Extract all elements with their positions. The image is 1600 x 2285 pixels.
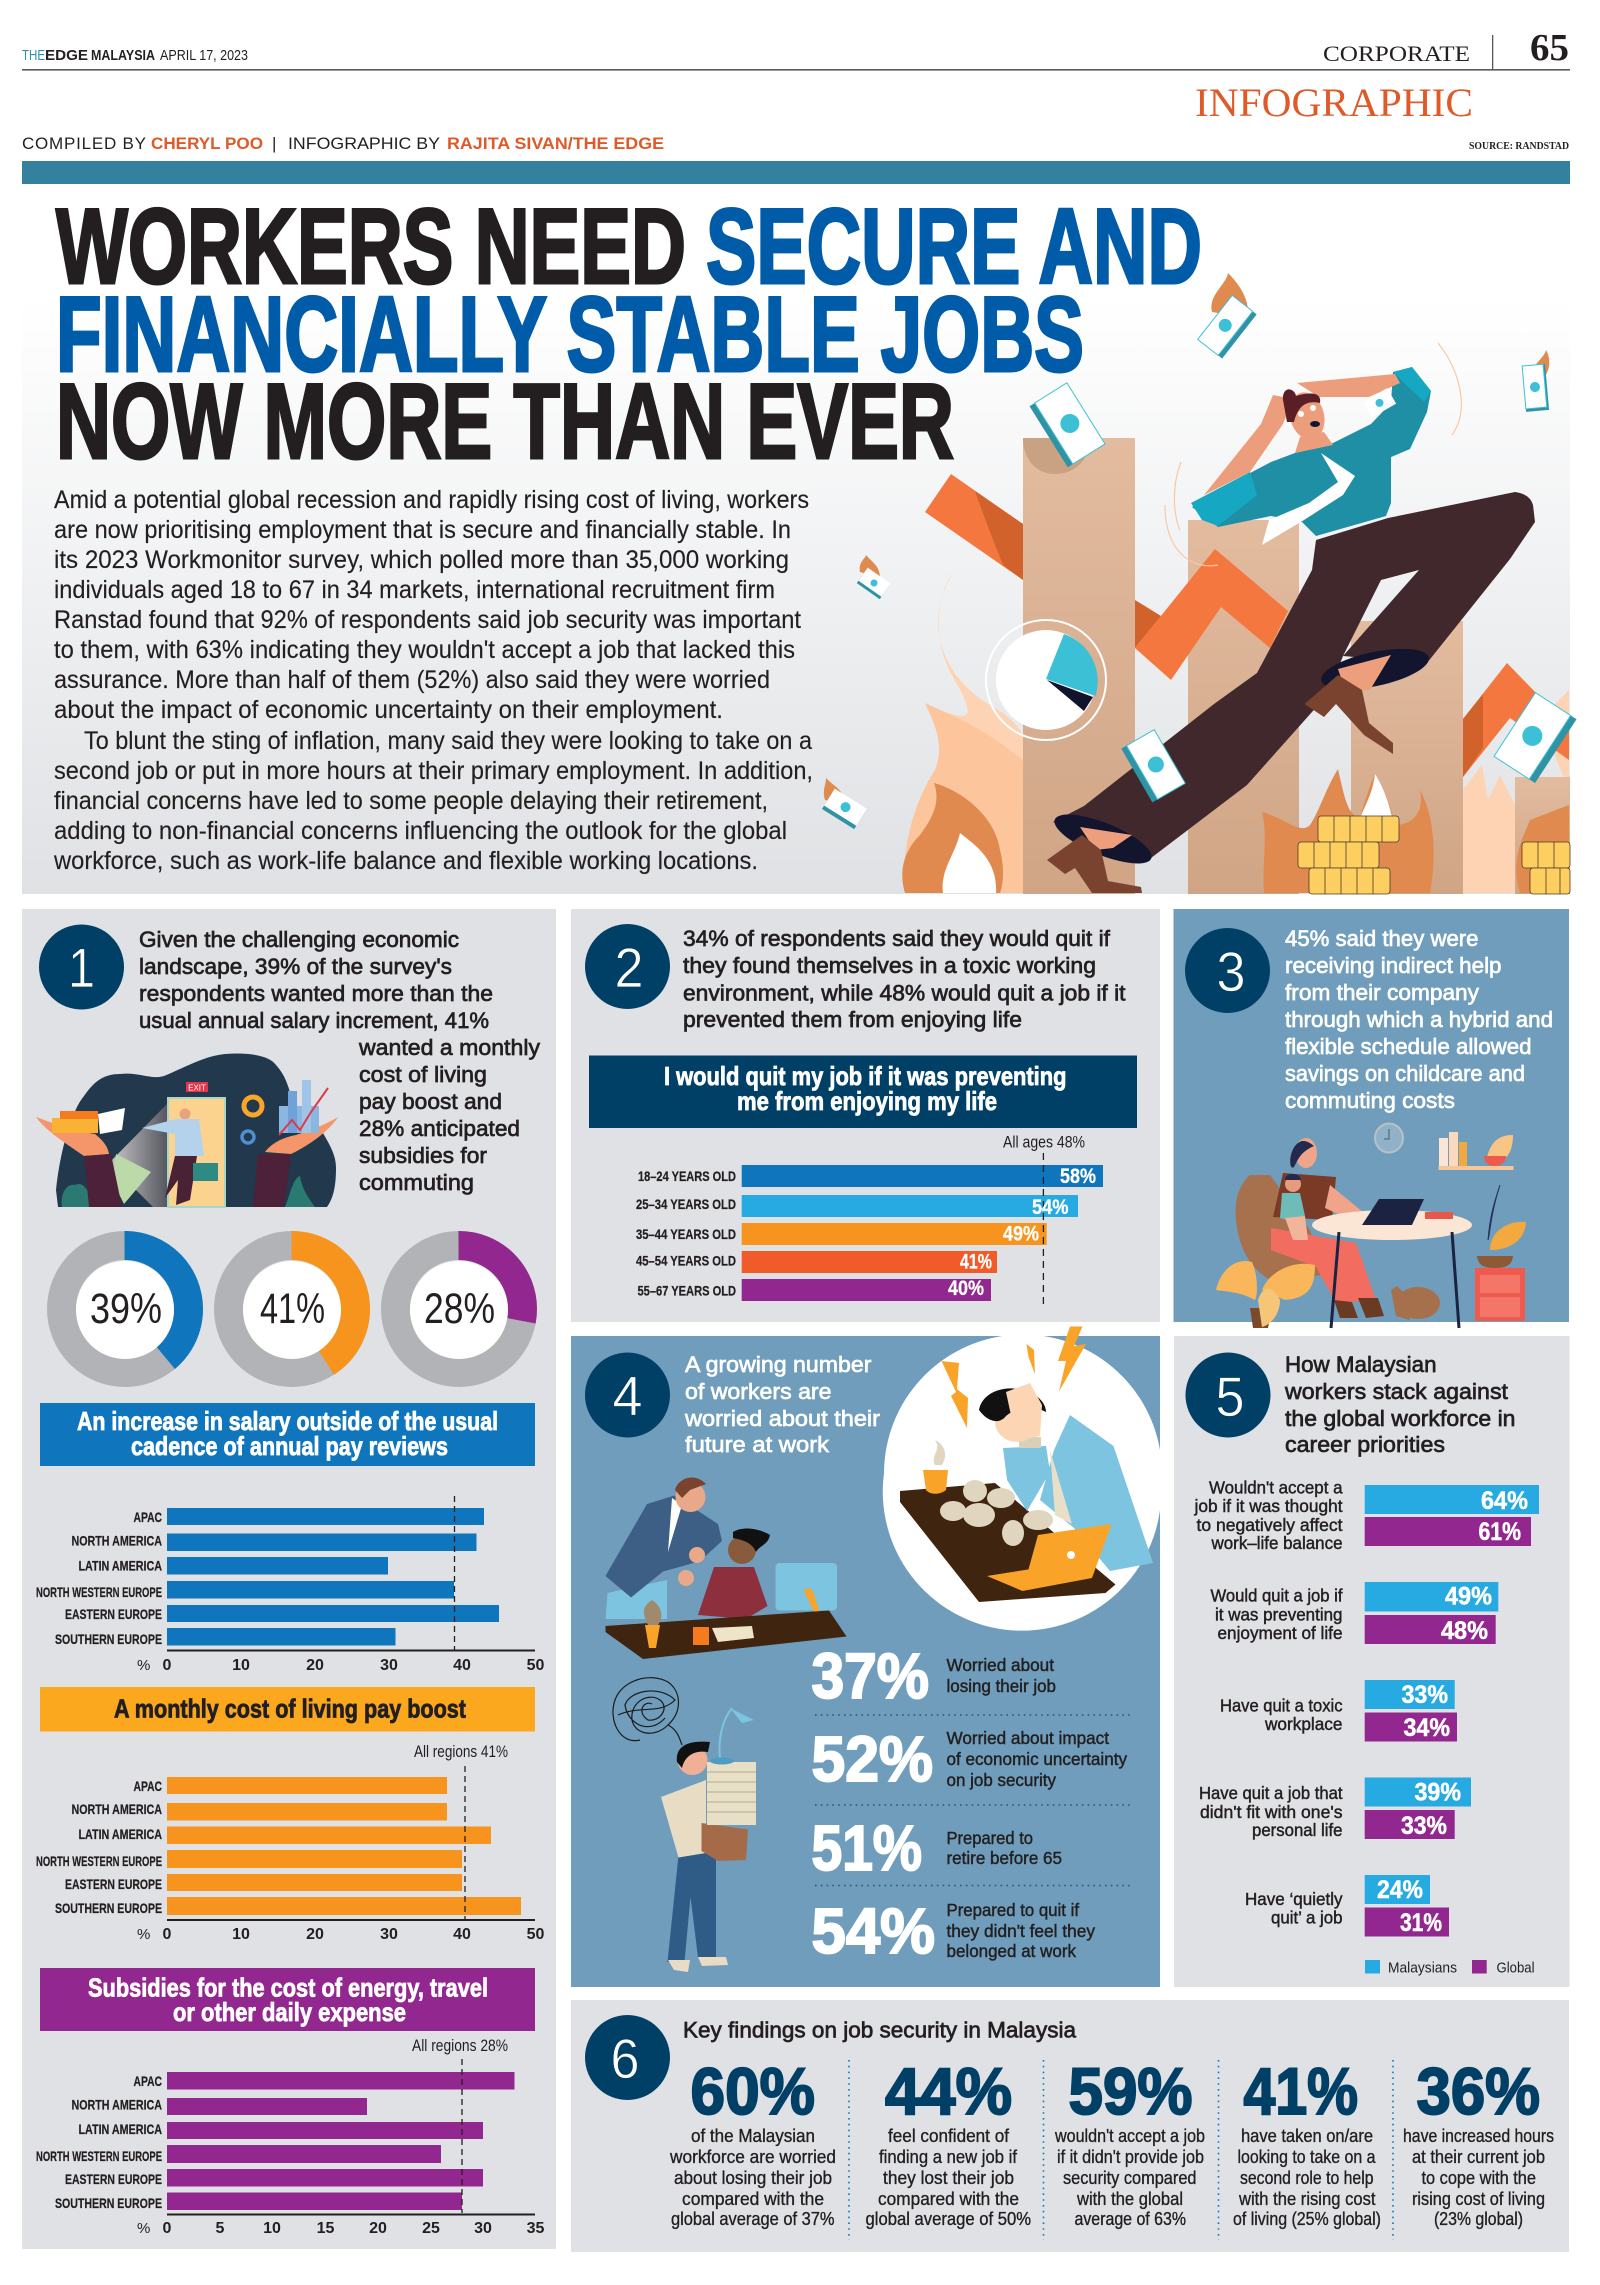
comparison: toxic workplace [1220, 1680, 1457, 1742]
intro text: second job or put in more hours at their primary employment. In addition, [54, 757, 813, 785]
intro text: its 2023 Workmonitor survey, which polled more than 35,000 working [54, 546, 789, 574]
illustration: worried man carrying box [613, 1678, 756, 1972]
finding: 41% [1233, 2054, 1381, 2229]
flames behind charts [904, 573, 1023, 893]
stat: 54%: 54% [812, 1895, 935, 1967]
bar chart: cost of living boost by region: NORTH WESTERN EUROPE [36, 1853, 162, 1869]
number badge 3 [1185, 928, 1270, 1013]
panel 1 intro text: Given the challenging economic [139, 927, 459, 952]
comparison: personal life fit: personal life [1252, 1820, 1342, 1840]
donut: 28% [396, 1246, 522, 1372]
bar chart: cost of living boost by region: % [137, 1926, 150, 1943]
stat: 37%: 37% [812, 1640, 929, 1712]
source note: SOURCE: RANDSTAD [1469, 140, 1569, 152]
hero illustration: falling worker and burning charts [822, 273, 1577, 894]
bar chart: salary increase by region: % [137, 1657, 150, 1674]
headline: FINANCIALLY STABLE JOBS [56, 274, 1084, 394]
bar chart: subsidies by region: LATIN AMERICA [78, 2121, 162, 2137]
bar chart: subsidies by region: 0 [163, 2220, 172, 2237]
credits line: RAJITA SIVAN/THE EDGE [447, 134, 664, 153]
comparison: quiet quitting: quit’ a job [1271, 1908, 1342, 1928]
panel: hero [22, 184, 1577, 894]
bar chart: subsidies by region: 30 [474, 2220, 492, 2237]
chart heading: salary increase [40, 1403, 535, 1466]
finding: 60%: compared with the [682, 2189, 824, 2209]
illustration: boss and employee at desk [606, 1477, 846, 1659]
comparison: personal life fit: 33% [1401, 1812, 1447, 1840]
panel 2 intro text: 34% of respondents said they would quit if [683, 926, 1111, 951]
panel 1 intro text [139, 927, 541, 1195]
chart bars [1023, 438, 1135, 894]
finding: 59%: security compared [1063, 2168, 1196, 2188]
intro text: individuals aged 18 to 67 in 34 markets, international recruitment firm [54, 576, 775, 604]
number badge 6 [585, 2015, 670, 2100]
chart heading: salary increase: An increase in salary outside of the usual [77, 1406, 498, 1436]
shirt [1192, 424, 1391, 536]
comparison: enjoyment of life: 48% [1441, 1617, 1488, 1645]
coins [1298, 816, 1570, 894]
bar chart: subsidies by region: 35 [527, 2220, 544, 2237]
panel 5: Malaysia vs global [1174, 1336, 1570, 1987]
comparison: work-life balance [1194, 1478, 1539, 1553]
illustration: stressed man at desk [883, 1326, 1160, 1631]
bar chart: cost of living boost by region: 30 [380, 1926, 398, 1943]
page number: 65 [1530, 27, 1569, 69]
panel 1 intro text: pay boost and [359, 1089, 502, 1114]
finding: 36%: rising cost of living [1412, 2189, 1545, 2209]
number badge 4: 4 [612, 1364, 642, 1427]
donut: 41% [228, 1246, 356, 1372]
number badge 5 [1186, 1352, 1270, 1438]
panel 1 intro text: wanted a monthly [358, 1035, 541, 1060]
stat: 37% [812, 1640, 1056, 1712]
intro text: adding to non-financial concerns influencing the outlook for the global [54, 817, 787, 845]
panel 2 intro text: they found themselves in a toxic working [683, 953, 1096, 978]
panel 1 intro text: cost of living [359, 1062, 487, 1087]
bar chart: cost of living boost by region: APAC [134, 1778, 162, 1794]
chart heading: subsidies [40, 1968, 535, 2031]
comparison: toxic workplace: workplace [1264, 1714, 1342, 1734]
stat: 52%: on job security [946, 1770, 1056, 1790]
bar chart: cost of living boost by region [36, 1742, 544, 1943]
panel 2 intro text: environment, while 48% would quit a job if it [683, 980, 1126, 1006]
chart heading: cost of living boost: A monthly cost of living pay boost [114, 1694, 466, 1724]
finding: 59% [1054, 2054, 1205, 2229]
number badge 2: 2 [614, 936, 644, 999]
headline: NOW MORE THAN EVER [56, 361, 954, 481]
bar chart: quit job by age group [636, 1132, 1103, 1304]
panel 3 text: commuting costs [1285, 1088, 1455, 1113]
comparison: personal life fit [1199, 1778, 1471, 1840]
panel 3 text: receiving indirect help [1285, 953, 1502, 978]
panel 3 text: savings on childcare and [1285, 1061, 1525, 1086]
intro text: assurance. More than half of them (52%) also said they were worried [54, 666, 770, 694]
legend [1365, 1960, 1534, 1976]
comparison: work-life balance: job if it was thought [1194, 1496, 1343, 1516]
bar chart: quit job by age group: 45–54 YEARS OLD [636, 1252, 736, 1268]
donut: 41%: 41% [260, 1285, 325, 1333]
comparison: quiet quitting: 24% [1377, 1876, 1423, 1904]
finding: 41%: second role to help [1240, 2168, 1374, 2188]
panel 3 text: flexible schedule allowed [1285, 1034, 1532, 1059]
finding: 59%: 59% [1068, 2054, 1192, 2128]
bar chart: subsidies by region: NORTH WESTERN EUROPE [36, 2148, 162, 2164]
arms and head [1204, 395, 1293, 495]
masthead: The Edge Malaysia date [22, 47, 248, 64]
front flames [902, 783, 1003, 893]
bar chart: quit job by age group: 40% [948, 1277, 984, 1300]
bar chart: cost of living boost by region: 0 [163, 1926, 172, 1943]
panel 5 text [1284, 1352, 1516, 1457]
finding: 60%: 60% [690, 2054, 815, 2128]
chart heading: quit my job: me from enjoying my life [737, 1086, 997, 1116]
bar chart: quit job by age group: 58% [1060, 1165, 1096, 1188]
bar chart: cost of living boost by region: NORTH AMERICA [72, 1801, 162, 1817]
pie chart [986, 620, 1106, 740]
stat: 52%: Worried about impact [946, 1728, 1109, 1748]
legend: Global [1496, 1960, 1534, 1976]
headline [56, 186, 1202, 481]
finding: 41%: have taken on/are [1241, 2126, 1373, 2146]
comparison: work-life balance: Wouldn't accept a [1209, 1478, 1343, 1498]
bar chart: cost of living boost by region: 10 [232, 1926, 250, 1943]
number badge 6: 6 [610, 2027, 640, 2090]
finding: 59%: if it didn't provide job [1057, 2147, 1204, 2167]
finding: 44%: finding a new job if [879, 2147, 1018, 2167]
comparison: enjoyment of life: 49% [1445, 1582, 1492, 1610]
finding: 60%: global average of 37% [671, 2209, 834, 2229]
credits line: INFOGRAPHIC BY [288, 134, 440, 153]
page masthead [22, 27, 1570, 153]
bar chart: salary increase by region: 20 [306, 1657, 324, 1674]
bar chart: salary increase by region: NORTH WESTERN EUROPE [36, 1584, 162, 1600]
panel 3 text: 45% said they were [1285, 926, 1478, 951]
comparison: enjoyment of life [1210, 1582, 1498, 1645]
finding: 41%: with the rising cost [1238, 2189, 1376, 2209]
masthead: The Edge Malaysia date: APRIL 17, 2023 [160, 47, 248, 64]
finding: 41%: looking to take on a [1238, 2147, 1376, 2167]
masthead: The Edge Malaysia date: THE [22, 47, 45, 64]
panel 2 intro text [683, 926, 1126, 1032]
stat: 54%: they didn't feel they [946, 1921, 1095, 1941]
bar chart: subsidies by region: 5 [216, 2220, 225, 2237]
panel 2 intro text: prevented them from enjoying life [683, 1007, 1022, 1032]
stat: 52%: 52% [812, 1723, 933, 1795]
finding: 59%: with the global [1076, 2189, 1183, 2209]
stat: 54%: belonged at work [946, 1941, 1076, 1961]
comparison: enjoyment of life: it was preventing [1215, 1604, 1342, 1624]
intro text: Amid a potential global recession and rapidly rising cost of living, workers [54, 486, 809, 514]
bar chart: salary increase by region: NORTH AMERICA [72, 1532, 162, 1548]
comparison: personal life fit: 39% [1414, 1778, 1461, 1806]
panel 4 text: A growing number [685, 1352, 872, 1377]
bar chart: salary increase by region: 0 [163, 1657, 172, 1674]
finding: 36%: 36% [1416, 2054, 1540, 2128]
number badge 2 [585, 924, 670, 1009]
panel 1 intro text: 28% anticipated [359, 1116, 520, 1141]
bar chart: salary increase by region: EASTERN EUROPE [65, 1606, 162, 1622]
masthead: The Edge Malaysia date: MALAYSIA [91, 47, 155, 64]
credits line [22, 134, 664, 153]
bar chart: subsidies by region: 25 [422, 2220, 440, 2237]
comparison: work-life balance: to negatively affect [1196, 1515, 1343, 1535]
bar chart: subsidies by region: 15 [317, 2220, 334, 2237]
finding: 59%: wouldn't accept a job [1054, 2126, 1205, 2146]
bar chart: quit job by age group: 25–34 YEARS OLD [636, 1196, 736, 1212]
panel 4 text [684, 1352, 881, 1457]
comparison: toxic workplace: 34% [1404, 1714, 1450, 1742]
bar chart: salary increase by region: SOUTHERN EUROPE [55, 1631, 162, 1647]
bar chart: quit job by age group: 18–24 YEARS OLD [638, 1168, 736, 1184]
chart heading: subsidies: or other daily expense [173, 1997, 406, 2027]
finding: 36%: at their current job [1412, 2147, 1545, 2167]
bar chart: cost of living boost by region: 40 [453, 1926, 471, 1943]
chart heading: salary increase: cadence of annual pay reviews [131, 1431, 448, 1461]
chart heading: quit my job: I would quit my job if it was preventing [664, 1061, 1066, 1091]
masthead: The Edge Malaysia date: EDGE [45, 47, 88, 64]
finding: 60%: about losing their job [674, 2168, 832, 2188]
bar chart: subsidies by region: APAC [134, 2073, 162, 2089]
bar chart: subsidies by region: EASTERN EUROPE [65, 2171, 162, 2187]
boots and cuffs [1047, 641, 1432, 893]
comparison: work-life balance: 64% [1481, 1487, 1528, 1515]
finding: 41%: 41% [1244, 2054, 1358, 2128]
comparison: quiet quitting: Have ‘quietly [1245, 1889, 1343, 1909]
comparison: personal life fit: Have quit a job that [1199, 1783, 1343, 1803]
stat: 52% [812, 1723, 1127, 1795]
finding: 60% [669, 2054, 836, 2229]
panel 4 text: of workers are [685, 1379, 832, 1404]
section name: CORPORATE [1323, 41, 1470, 66]
intro text: To blunt the sting of inflation, many said they were looking to take on a [84, 727, 812, 755]
intro text: to them, with 63% indicating they wouldn't accept a job that lacked this [54, 636, 795, 664]
flying bills [822, 273, 1577, 829]
chart heading: cost of living boost [40, 1687, 535, 1732]
bar chart: subsidies by region: 20 [369, 2220, 387, 2237]
panel 5 text: How Malaysian [1285, 1352, 1436, 1377]
intro text: about the impact of economic uncertainty on their employment. [54, 696, 723, 724]
panel 3 text [1285, 926, 1553, 1113]
panel 1 intro text: respondents wanted more than the [139, 981, 493, 1006]
comparison: toxic workplace: 33% [1402, 1681, 1448, 1709]
bar chart: cost of living boost by region: 50 [527, 1926, 544, 1943]
finding: 36% [1403, 2054, 1554, 2229]
comparison: enjoyment of life: enjoyment of life [1218, 1623, 1342, 1643]
bar chart: salary increase by region: 50 [527, 1657, 544, 1674]
bar chart: cost of living boost by region: SOUTHERN EUROPE [55, 1900, 162, 1916]
panel 3: hybrid work savings [1174, 909, 1569, 1328]
tie [1262, 453, 1355, 545]
panel 1 intro text: usual annual salary increment, 41% [139, 1008, 489, 1033]
bar chart: salary increase by region: 40 [453, 1657, 471, 1674]
credits line: CHERYL POO [151, 134, 263, 153]
comparison: quiet quitting: 31% [1400, 1909, 1442, 1937]
bar chart: salary increase by region [36, 1496, 544, 1674]
intro text: financial concerns have led to some people delaying their retirement, [54, 787, 768, 815]
bar chart: cost of living boost by region: All regions 41% [414, 1742, 508, 1761]
illustration: worker leaving through exit door: EXIT [188, 1084, 206, 1092]
number badge 5: 5 [1216, 1365, 1244, 1428]
finding: 36%: have increased hours [1403, 2126, 1554, 2146]
comparison: toxic workplace: Have quit a toxic [1220, 1696, 1343, 1716]
finding: 36%: to cope with the [1422, 2168, 1536, 2188]
chart heading: subsidies: Subsidies for the cost of energy, travel [88, 1972, 488, 2002]
credits line: | [272, 134, 276, 153]
finding: 60%: of the Malaysian [691, 2126, 815, 2146]
intro text: Ranstad found that 92% of respondents said job security was important [54, 606, 801, 634]
number badge 1: 1 [68, 936, 95, 999]
stat: 51% [812, 1812, 1062, 1884]
bar chart: subsidies by region [36, 2036, 544, 2237]
panel 6 heading: Key findings on job security in Malaysia [683, 2018, 1076, 2042]
panel 4 text: worried about their [684, 1406, 881, 1431]
panel 4 text: future at work [685, 1432, 830, 1457]
panel 5 text: workers stack against [1284, 1379, 1509, 1404]
bar chart: subsidies by region: % [137, 2220, 150, 2237]
comparison: enjoyment of life: Would quit a job if [1210, 1586, 1343, 1606]
bar chart: quit job by age group: 54% [1032, 1196, 1069, 1219]
intro text [53, 486, 813, 875]
illustration: worker leaving through exit door [36, 1053, 338, 1207]
panel 2: quitting by age [571, 909, 1160, 1322]
panel 1: pay expectations [22, 909, 556, 2249]
trousers [1053, 492, 1535, 858]
intro text: workforce, such as work-life balance and flexible working locations. [53, 847, 758, 875]
comparison: quiet quitting [1245, 1875, 1449, 1937]
bar chart: cost of living boost by region: 20 [306, 1926, 324, 1943]
stat: 37%: Worried about [946, 1655, 1054, 1675]
finding: 44%: 44% [885, 2054, 1012, 2128]
intro text: are now prioritising employment that is secure and financially stable. In [54, 516, 791, 544]
bar chart: quit job by age group: 41% [960, 1250, 992, 1274]
panel 6: key findings [571, 2000, 1569, 2252]
finding: 44%: they lost their job [883, 2168, 1014, 2188]
credits line: COMPILED BY [22, 134, 146, 153]
bar chart: salary increase by region: 30 [380, 1657, 398, 1674]
bar chart: quit job by age group: 49% [1003, 1222, 1039, 1246]
motion lines [1165, 343, 1461, 566]
finding: 36%: (23% global) [1434, 2209, 1523, 2229]
comparison: personal life fit: didn't fit with one's [1200, 1802, 1343, 1822]
finding: 59%: average of 63% [1074, 2209, 1186, 2229]
finding: 44%: global average of 50% [866, 2209, 1031, 2229]
chart heading: quit my job [589, 1056, 1137, 1128]
bar chart: salary increase by region: 10 [232, 1657, 250, 1674]
finding: 44% [866, 2054, 1031, 2229]
bar chart: quit job by age group: 35–44 YEARS OLD [636, 1226, 736, 1242]
panel 5 text: career priorities [1285, 1432, 1445, 1457]
donut: 39%: 39% [90, 1285, 162, 1333]
bar chart: cost of living boost by region: EASTERN EUROPE [65, 1876, 162, 1892]
panel 1 intro text: landscape, 39% of the survey's [139, 954, 452, 979]
donut: 39% [62, 1246, 188, 1372]
panel 3 text: through which a hybrid and [1285, 1007, 1553, 1032]
stat: 51%: retire before 65 [946, 1848, 1062, 1868]
bar chart: quit job by age group: 55–67 YEARS OLD [638, 1282, 736, 1298]
legend: Malaysians [1388, 1960, 1457, 1976]
bar chart: subsidies by region: All regions 28% [412, 2036, 508, 2055]
finding: 44%: compared with the [878, 2189, 1019, 2209]
bar chart: salary increase by region: APAC [134, 1509, 162, 1525]
number badge 4 [585, 1352, 670, 1438]
arrow zigzag [925, 474, 1023, 580]
comparison: work-life balance: work–life balance [1211, 1533, 1342, 1553]
stat: 37%: losing their job [946, 1676, 1056, 1696]
panel 1 intro text: commuting [359, 1170, 474, 1195]
headline: WORKERS NEED [56, 186, 686, 306]
bar chart: cost of living boost by region: LATIN AMERICA [78, 1826, 162, 1842]
panel 1 intro text: subsidies for [359, 1143, 488, 1168]
panel 5 text: the global workforce in [1285, 1406, 1516, 1431]
headline: SECURE AND [706, 186, 1202, 306]
bar chart: salary increase by region: LATIN AMERICA [78, 1558, 162, 1574]
bar chart: quit job by age group: All ages 48% [1003, 1132, 1085, 1152]
number badge 1 [39, 924, 124, 1010]
bar chart: subsidies by region: 10 [263, 2220, 281, 2237]
stat: 52%: of economic uncertainty [946, 1749, 1127, 1769]
bar chart: subsidies by region: SOUTHERN EUROPE [55, 2195, 162, 2211]
finding: 41%: of living (25% global) [1233, 2209, 1381, 2229]
stat: 51%: 51% [812, 1812, 922, 1884]
stat: 54%: Prepared to quit if [946, 1900, 1079, 1920]
bar chart: subsidies by region: NORTH AMERICA [72, 2096, 162, 2112]
stat: 54% [812, 1895, 1095, 1967]
infographic label: INFOGRAPHIC [1195, 80, 1473, 125]
finding: 60%: workforce are worried [669, 2147, 836, 2167]
illustration: mother working at home [1216, 1124, 1526, 1328]
finding: 44%: feel confident of [888, 2126, 1010, 2146]
stat: 51%: Prepared to [946, 1828, 1033, 1848]
donut: 28%: 28% [424, 1285, 495, 1333]
number badge 3: 3 [1216, 940, 1246, 1003]
panel 4: worries about the future [571, 1326, 1160, 1987]
comparison: work-life balance: 61% [1478, 1518, 1521, 1546]
panel 3 text: from their company [1285, 980, 1480, 1005]
